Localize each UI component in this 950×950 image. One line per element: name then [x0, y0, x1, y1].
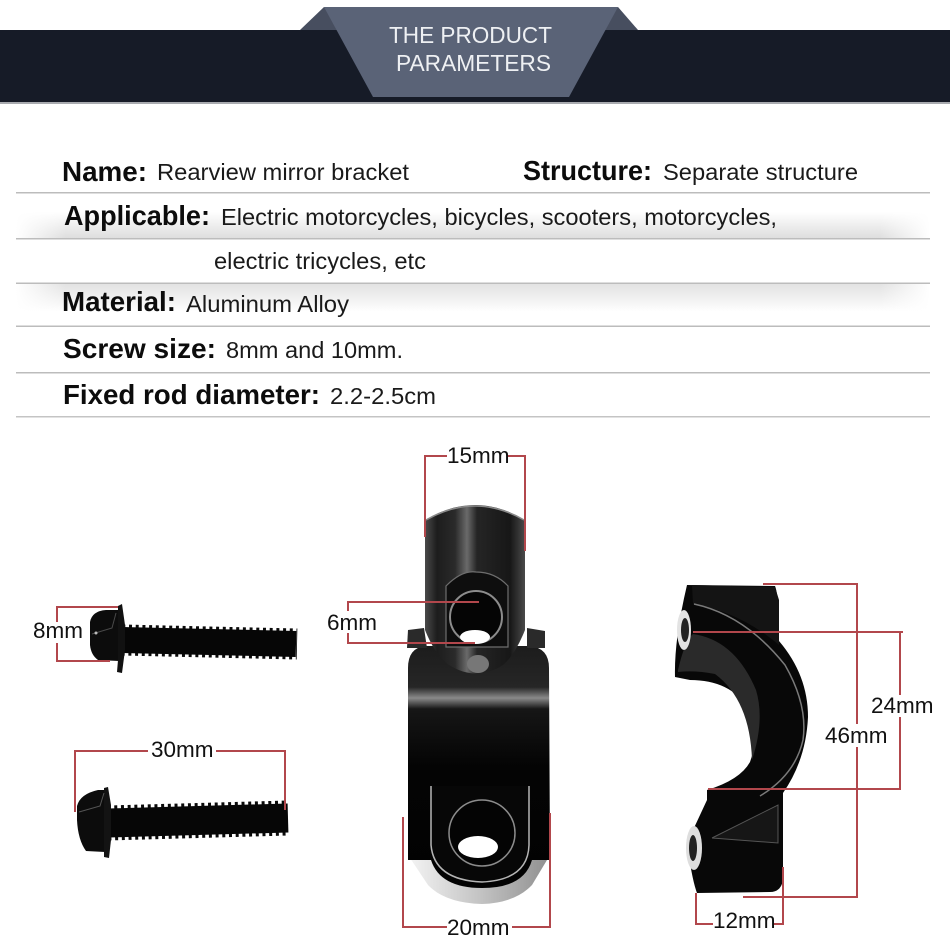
dimension lines: [75, 751, 285, 812]
row: fixed rod diameter: Fixed rod diameter:: [63, 379, 320, 410]
top hole: [677, 610, 691, 650]
46mm dimension: 46mm: [825, 723, 888, 748]
long bolt with 30mm dimension: [75, 737, 288, 858]
parameter list: [62, 155, 858, 410]
row: screw size: [63, 333, 403, 364]
bracket front dimensions: [327, 443, 550, 940]
bracket silhouette: [675, 585, 808, 893]
bolt shaft: [122, 640, 297, 644]
banner title: PARAMETERS: [396, 50, 551, 76]
upper bolt hole: [446, 572, 508, 647]
12mm dimension: [696, 867, 783, 933]
outer arc highlight: [694, 604, 804, 796]
banner right wing: [600, 7, 638, 30]
6mm dimension: [327, 602, 479, 643]
bolt head: [90, 604, 125, 673]
top end face: [692, 585, 779, 645]
banner title: [389, 22, 552, 76]
row: structure: Structure:: [523, 155, 652, 186]
row: applicable: Electric motorcycles, bicycles, scooters, motorcycles,: [221, 204, 777, 230]
row: material: [62, 286, 349, 317]
46mm dimension: [743, 584, 888, 897]
short bolt with 8mm dimension: [33, 604, 297, 673]
bolt shaft: [108, 818, 288, 823]
row: structure: Separate structure: [663, 159, 858, 185]
row: screw size: Screw size:: [63, 333, 216, 364]
20mm dimension: 20mm: [447, 915, 510, 940]
lower facet lines: [712, 805, 778, 843]
bottom hole: [686, 826, 702, 870]
top inner bevel: [678, 634, 760, 760]
15mm dimension: [425, 443, 525, 551]
20mm dimension: [403, 813, 550, 940]
lower tab base: [408, 855, 550, 904]
row shading: [16, 192, 930, 418]
banner title: THE PRODUCT: [389, 22, 552, 48]
clamp body: [408, 646, 550, 888]
dimension label: 30mm: [151, 737, 214, 762]
bracket front view: [407, 505, 550, 904]
row: structure: [523, 155, 858, 186]
bolt head: [77, 787, 111, 858]
row: applicable: electric tricycles, etc: [214, 248, 426, 274]
row: name: Rearview mirror bracket: [157, 159, 409, 185]
dimension label: 8mm: [33, 618, 83, 643]
bracket side view: [675, 585, 808, 893]
6mm dimension: 6mm: [327, 610, 377, 635]
row: applicable: Applicable:: [64, 200, 210, 231]
dimension lines: [57, 607, 118, 661]
neck highlight: [467, 655, 489, 673]
row: applicable: [64, 200, 777, 274]
12mm dimension: 12mm: [713, 908, 776, 933]
banner centre plate: [324, 7, 618, 97]
row: screw size: 8mm and 10mm.: [226, 337, 403, 363]
row: name: [62, 156, 409, 187]
row: fixed rod diameter: 2.2-2.5cm: [330, 383, 436, 409]
lower bolt hole: [449, 800, 515, 866]
row: name: Name:: [62, 156, 147, 187]
24mm dimension: [693, 632, 934, 789]
upper tube: [425, 505, 525, 674]
bracket side dimensions: [693, 584, 934, 933]
row: material: Aluminum Alloy: [186, 291, 349, 317]
side ears: [407, 628, 545, 648]
lower tab: [431, 786, 529, 882]
row: material: Material:: [62, 286, 176, 317]
24mm dimension: 24mm: [871, 693, 934, 718]
row: fixed rod diameter: [63, 379, 436, 410]
header banner: [0, 7, 950, 104]
tube rim: [426, 506, 524, 520]
banner left wing: [300, 7, 342, 30]
15mm dimension: 15mm: [447, 443, 510, 468]
